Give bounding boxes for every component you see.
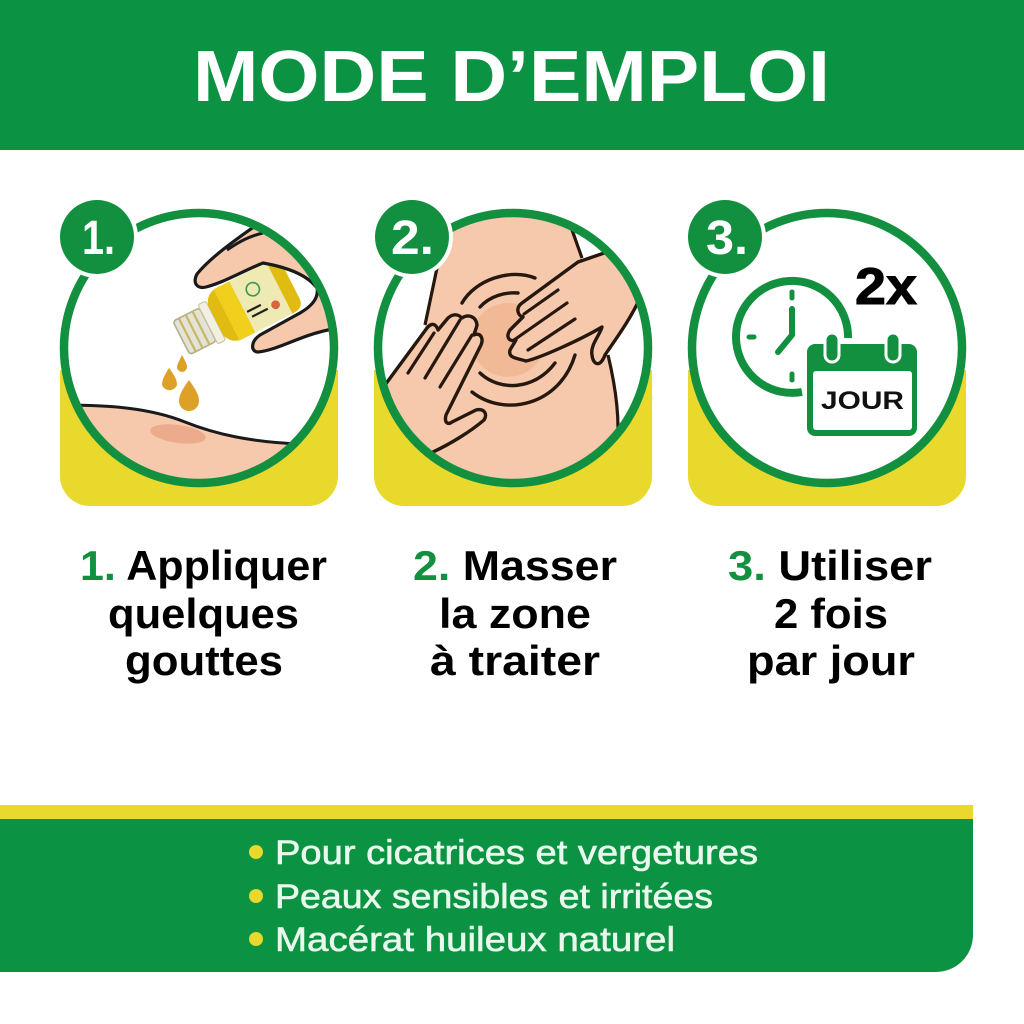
text block: step 2: à traiter (430, 637, 600, 684)
right hand (508, 251, 640, 364)
benefits list: Macérat huileux naturel (275, 921, 675, 959)
badge: 2 (371, 196, 453, 278)
icon: calendar (807, 333, 917, 436)
text block: step 3: par jour (747, 637, 915, 684)
text block: step 2 (413, 542, 617, 684)
text block: step 3: 2 fois (774, 590, 888, 637)
text block: step 1: quelques (108, 590, 299, 637)
text block: step 1: gouttes (125, 637, 283, 684)
treated area (476, 303, 540, 377)
scar (150, 424, 206, 444)
oil drops (162, 355, 199, 411)
panel: step 1 illustration (60, 213, 340, 506)
skin surface (80, 404, 290, 479)
panel: step 3 illustration (688, 213, 966, 506)
hand holding bottle (195, 226, 340, 352)
title: MODE D’EMPLOI (193, 37, 830, 117)
text block: step 1 (80, 542, 327, 684)
calendar label: JOUR (821, 387, 904, 415)
text block: step 3: 3. Utiliser (728, 542, 932, 589)
benefits list: Peaux sensibles et irritées (275, 878, 713, 916)
badge: 1: 1. (82, 212, 115, 265)
badge: 3: 3. (706, 212, 748, 265)
left hand (385, 315, 486, 470)
panel: step 2 illustration (374, 205, 652, 506)
badge: 3 (684, 196, 766, 278)
text block: step 3 (728, 542, 932, 684)
text block: step 2: 2. Masser (413, 542, 617, 589)
frequency label: 2x (855, 258, 917, 316)
benefits list: Pour cicatrices et vergetures (275, 834, 758, 872)
badge: 1 (56, 196, 138, 278)
text block: step 1: 1. Appliquer (80, 542, 327, 589)
oil bottle (173, 264, 301, 354)
badge: 2: 2. (391, 212, 434, 265)
text block: step 2: la zone (439, 590, 591, 637)
header banner (0, 0, 1024, 150)
footer banner (0, 805, 973, 972)
massage arcs (462, 274, 575, 405)
benefits list (249, 834, 758, 959)
icon: clock (736, 281, 848, 393)
body (424, 217, 616, 479)
